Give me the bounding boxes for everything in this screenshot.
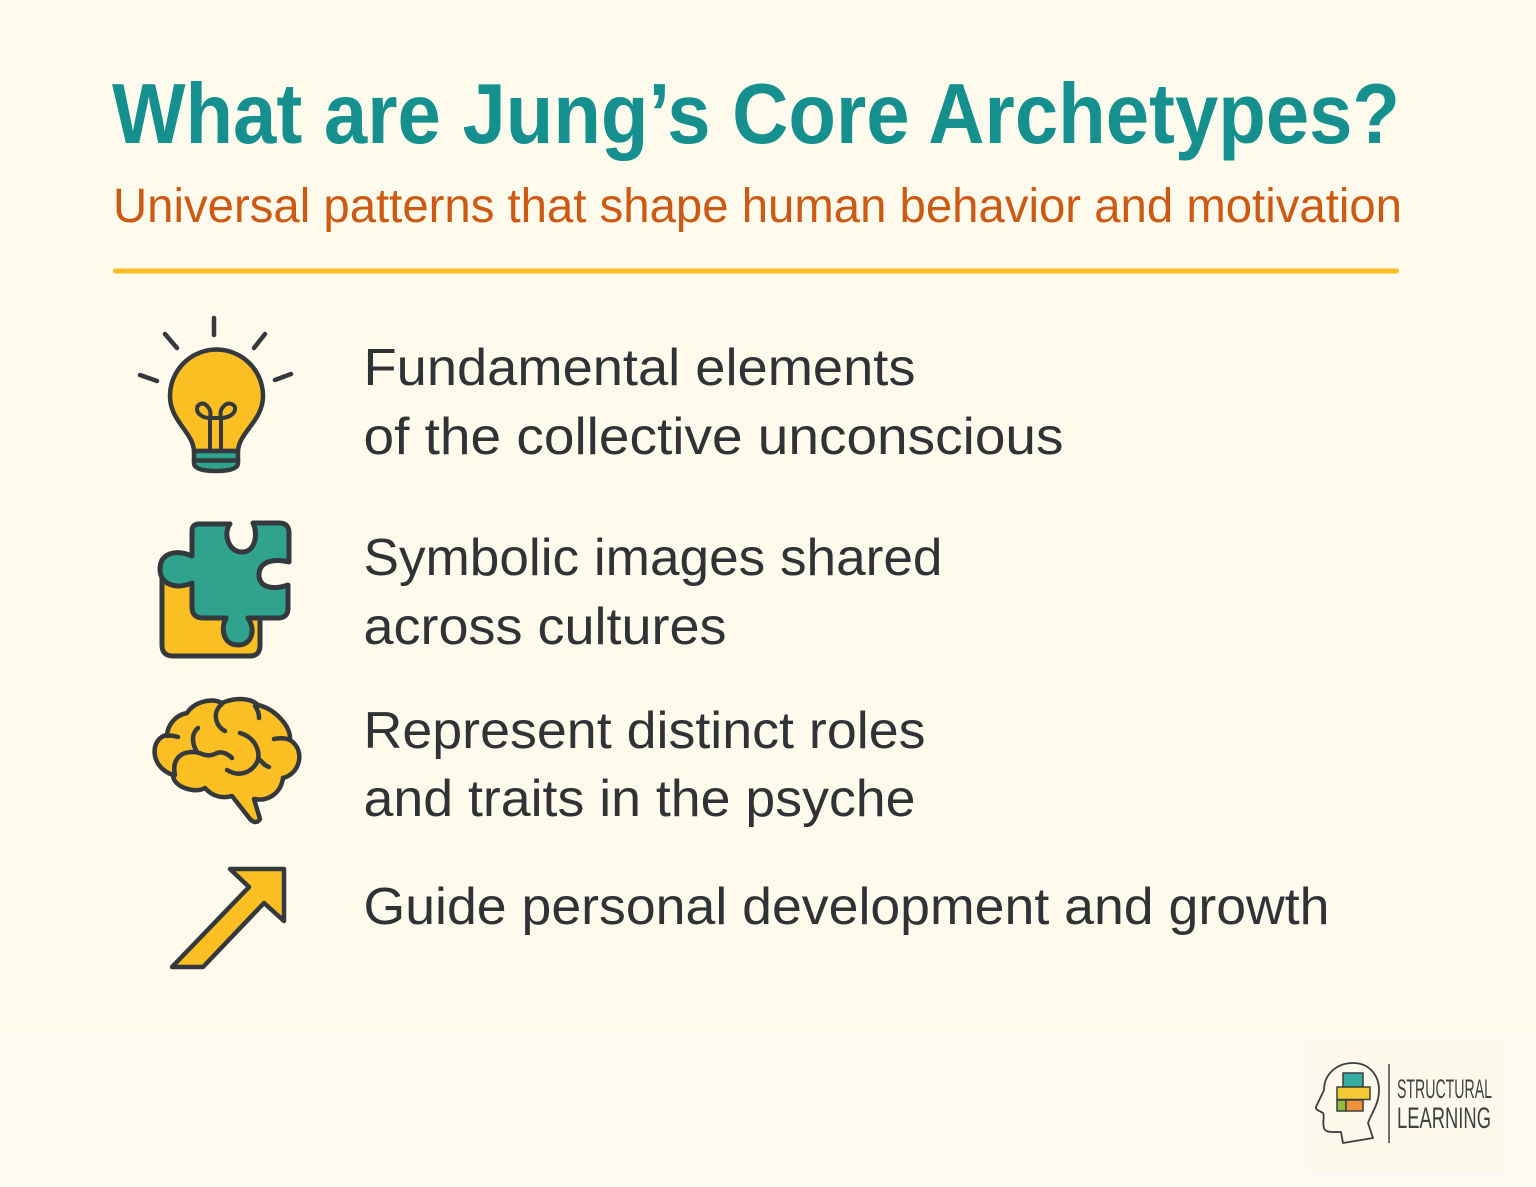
text block: point 1: Fundamental elements (364, 339, 916, 397)
text block: point 4: Guide personal development and growth (364, 878, 1330, 936)
logo wordmark (1397, 1074, 1492, 1135)
text block: point 3: Represent distinct roles (364, 702, 926, 760)
icon: arrow (172, 869, 284, 967)
logo blocks (1337, 1073, 1370, 1111)
text block: point 2 (364, 529, 942, 656)
text block: point 1 (364, 339, 1064, 466)
title: What are Jung’s Core Archetypes? (112, 67, 1400, 162)
icon: brain (155, 699, 299, 822)
subtitle: Universal patterns that shape human behavior and motivation (113, 180, 1402, 233)
text block: point 2: Symbolic images shared (364, 529, 942, 587)
icon: light bulb (140, 318, 291, 471)
logo: Structural Learning (1306, 1040, 1506, 1172)
icon: puzzle pieces (160, 523, 289, 656)
divider rule (113, 268, 1399, 274)
logo divider (1388, 1064, 1390, 1143)
text block: point 1: of the collective unconscious (364, 408, 1064, 466)
text block: point 3 (364, 702, 926, 828)
text block: point 3: and traits in the psyche (364, 770, 916, 828)
text block: point 2: across cultures (364, 598, 726, 656)
logo head outline (1316, 1063, 1379, 1143)
